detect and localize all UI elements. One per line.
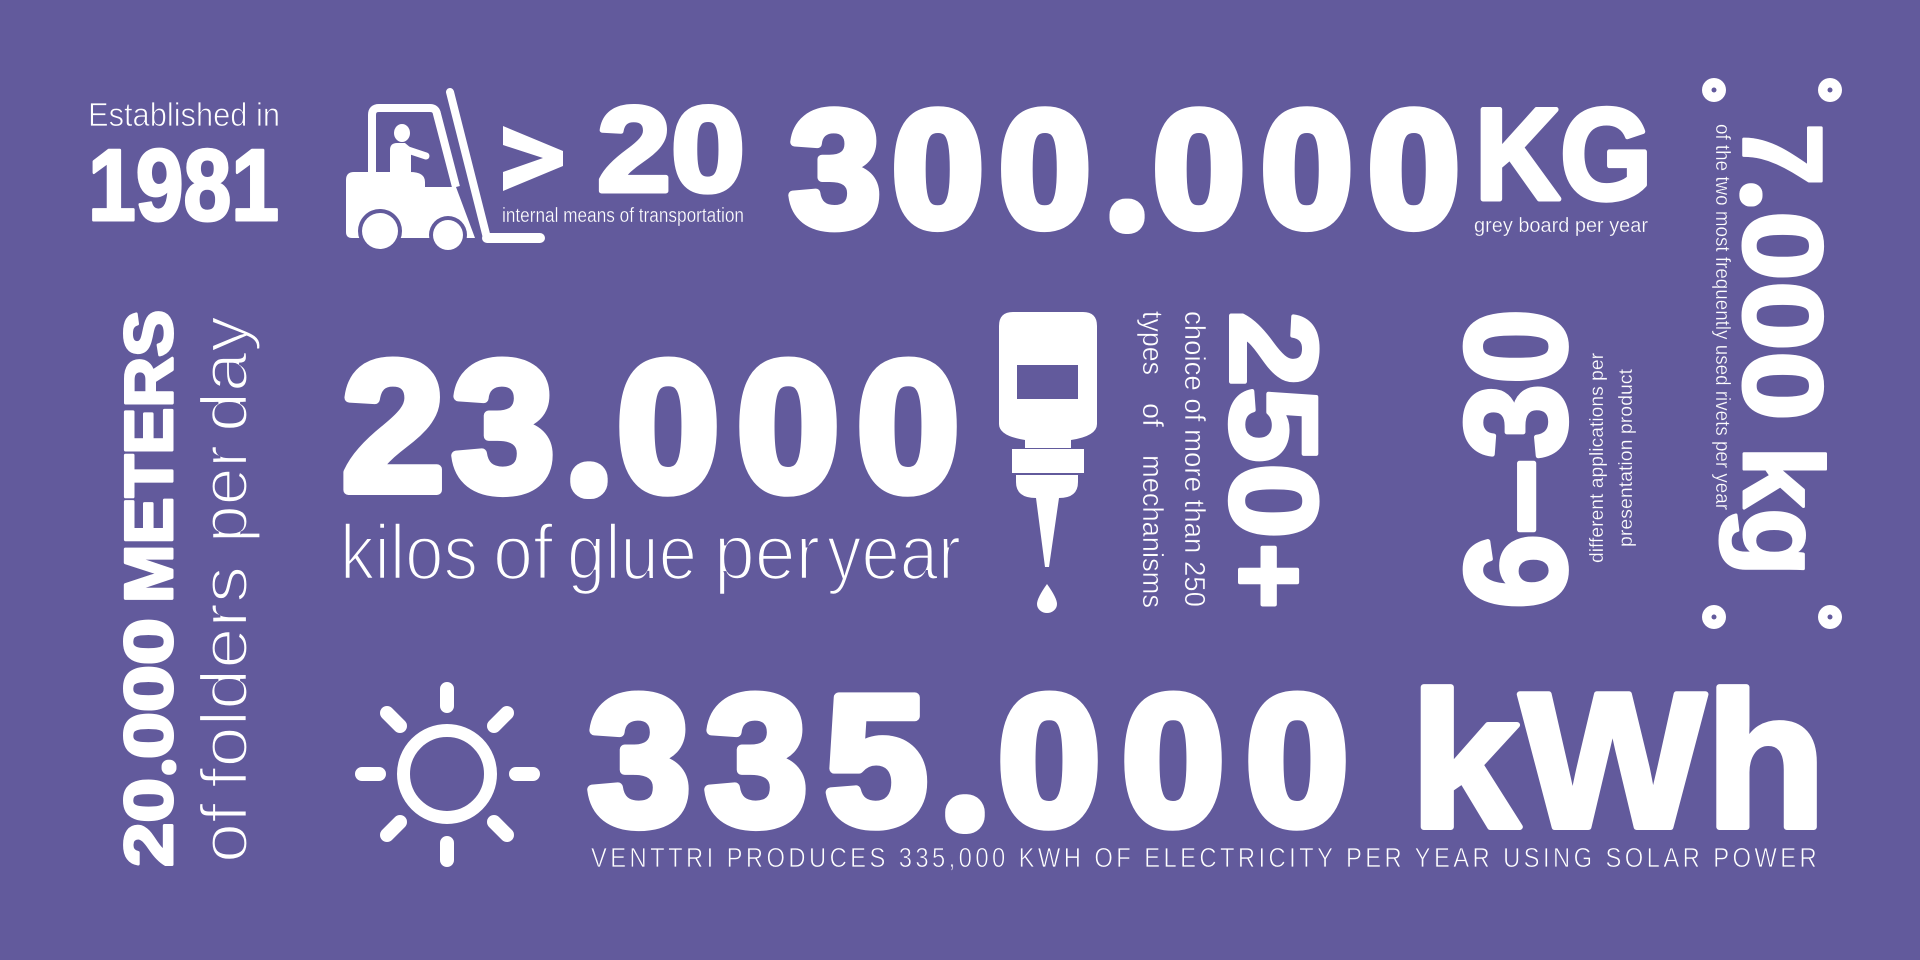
number 335.000: 000 <box>998 657 1348 863</box>
stat: rivets <box>1702 78 1845 629</box>
transport caption: internal means of transportation <box>502 205 744 227</box>
mechanisms caption line 2: mechanisms <box>1136 455 1168 608</box>
glue caption: per <box>714 508 820 596</box>
number 7.000 kg: . <box>1749 183 1753 200</box>
mechanisms caption line 2 <box>1136 311 1168 608</box>
folders caption <box>187 316 261 863</box>
number 23.000: 23 <box>342 323 554 529</box>
number 250+: + <box>1207 543 1332 609</box>
number 23.000 <box>342 323 959 529</box>
20.000 meters <box>111 310 187 867</box>
icon: sun <box>362 689 533 860</box>
mechanisms caption line 1: choice of more than 250 <box>1178 311 1210 607</box>
mechanisms caption line 2: of <box>1136 403 1168 428</box>
number 23.000: 000 <box>617 323 959 529</box>
icon: glue bottle <box>999 312 1097 613</box>
rivet dots <box>1702 78 1842 629</box>
stat: meters of folders <box>111 310 261 867</box>
number 335.000 <box>588 657 1348 863</box>
glue caption: of <box>493 508 553 596</box>
stat: glue <box>340 323 961 596</box>
number 7.000 kg <box>1720 123 1845 576</box>
applications caption: presentation product <box>1616 368 1637 547</box>
folders caption: per <box>187 445 261 543</box>
glue caption: kilos <box>340 508 478 596</box>
20.000 meters: 000 <box>111 618 187 759</box>
number 300.000: . <box>1124 198 1130 223</box>
number 7.000 kg: kg <box>1720 446 1845 576</box>
glue caption <box>340 508 961 596</box>
unit kWh: kWh <box>1410 652 1826 868</box>
year 1981: 1981 <box>88 130 279 242</box>
number 6-30: 6–30 <box>1437 309 1596 609</box>
stat: more than 20 transport means <box>502 81 745 227</box>
mechanisms caption line 2: types <box>1136 311 1168 375</box>
number 250+ <box>1204 311 1342 609</box>
number 7.000 kg: 000 <box>1720 211 1845 421</box>
solar caption: VENTTRI PRODUCES 335,000 KWH OF ELECTRICITY PER YEAR USING SOLAR POWER <box>591 841 1817 873</box>
number 300.000 <box>789 77 1460 261</box>
rivets caption: of the two most frequently used rivets per year <box>1711 124 1733 510</box>
greater-than sign <box>503 126 563 191</box>
number 7.000 kg: 7 <box>1720 123 1845 186</box>
stat: mechanisms <box>1136 311 1342 609</box>
number 23.000: . <box>586 461 592 488</box>
stat: applications <box>1437 309 1637 609</box>
number 20: 20 <box>597 81 745 217</box>
glue caption: glue <box>567 508 697 596</box>
established label: Established in <box>88 96 280 133</box>
20.000 meters: METERS <box>111 310 187 603</box>
number 335.000: . <box>962 794 968 822</box>
20.000 meters: . <box>168 760 171 771</box>
stat: solar power <box>588 652 1826 873</box>
number 335.000: 335 <box>588 657 927 863</box>
number 300.000: 000 <box>1153 77 1460 261</box>
icon: forklift <box>346 92 540 254</box>
folders caption: folders <box>187 566 261 788</box>
stat: grey board <box>789 77 1652 261</box>
grey board caption: grey board per year <box>1474 215 1648 237</box>
applications caption <box>1587 352 1637 563</box>
folders caption: of <box>187 802 261 863</box>
20.000 meters: 20 <box>111 778 187 867</box>
established block <box>88 96 280 242</box>
applications caption: different applications per <box>1587 352 1608 563</box>
folders caption: day <box>187 316 261 432</box>
glue caption: year <box>827 508 961 596</box>
number 300.000: 300 <box>789 77 1091 261</box>
number 250+: 250 <box>1204 311 1342 539</box>
unit KG: KG <box>1475 81 1652 227</box>
